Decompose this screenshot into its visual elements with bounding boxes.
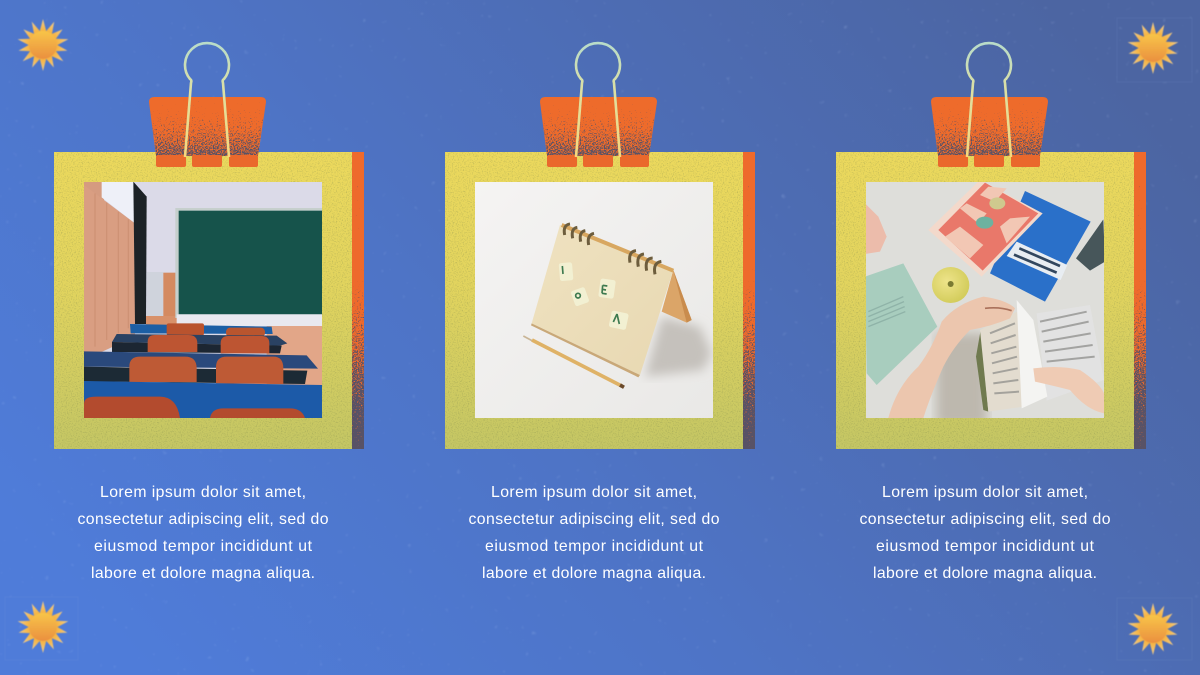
icon: star top left	[17, 19, 69, 71]
card frame 3	[836, 152, 1146, 449]
caption 2: Lorem ipsum dolor sit amet,	[491, 484, 697, 501]
panel: card 2 idea calendar	[445, 43, 755, 582]
photo: classroom	[80, 180, 330, 425]
card frame 2	[445, 152, 755, 449]
caption 1: Lorem ipsum dolor sit amet,	[100, 484, 306, 501]
caption 3: consectetur adipiscing elit, sed do	[860, 511, 1111, 528]
caption 3: eiusmod tempor incididunt ut	[876, 538, 1095, 555]
binder clip 3	[931, 43, 1048, 167]
icon: star top right	[1117, 18, 1192, 82]
panel: card 3 books on table	[836, 43, 1146, 582]
caption 1: eiusmod tempor incididunt ut	[94, 538, 313, 555]
icon: star bottom left	[5, 597, 78, 660]
caption 1: labore et dolore magna aliqua.	[91, 565, 315, 582]
binder clip 1	[149, 43, 266, 167]
caption 3	[860, 484, 1111, 582]
card frame 1	[54, 152, 364, 449]
caption 3: Lorem ipsum dolor sit amet,	[882, 484, 1088, 501]
caption 2: eiusmod tempor incididunt ut	[485, 538, 704, 555]
caption 2	[468, 484, 720, 582]
icon: star bottom right	[1117, 598, 1192, 660]
caption 1: consectetur adipiscing elit, sed do	[78, 511, 329, 528]
binder clip 2	[540, 43, 657, 167]
caption 3: labore et dolore magna aliqua.	[873, 565, 1097, 582]
caption 1	[78, 484, 329, 582]
panel: card 1 classroom	[54, 43, 364, 582]
caption 2: labore et dolore magna aliqua.	[482, 565, 706, 582]
photo: books on table	[860, 180, 1110, 427]
caption 2: consectetur adipiscing elit, sed do	[468, 511, 720, 528]
photo: idea calendar	[470, 180, 720, 425]
